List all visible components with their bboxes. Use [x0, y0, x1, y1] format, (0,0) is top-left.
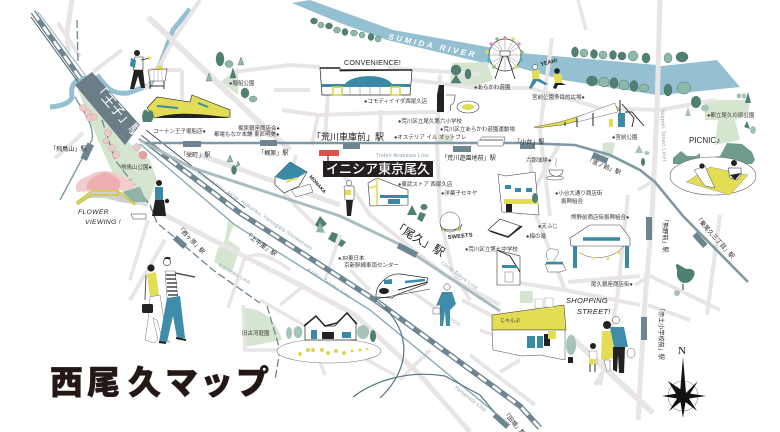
station labels: 「荒川遊園地前」駅	[441, 154, 496, 162]
station labels: 「東尾久三丁目」駅	[694, 214, 736, 260]
place labels: ●都立尾久の原公園	[707, 111, 755, 119]
station labels: 「熊野前」駅	[661, 216, 669, 253]
place labels: 梶原銀座商店会●	[238, 124, 280, 132]
stations: markers	[80, 140, 708, 429]
place labels: 尾久銀座商店街●	[591, 280, 633, 288]
place labels: ●梅の湯	[526, 232, 546, 240]
railway: Ueno Tokyo Line	[140, 140, 500, 311]
place labels: ●洋菓子セキヤ	[441, 189, 478, 197]
station labels: 「上中里」駅	[244, 230, 278, 258]
place labels: 振興組合	[561, 197, 584, 205]
illustration: tram	[477, 137, 505, 146]
text: picnic: PICNIC♪	[689, 136, 720, 145]
illustration: wine and dinner	[437, 85, 479, 113]
illustration: runners	[529, 58, 566, 89]
parks: green areas	[78, 62, 750, 347]
river label: SUMIDA RIVER	[388, 32, 478, 60]
illustration: sweets: SWEETS	[448, 232, 473, 241]
illustration: potted plant	[566, 335, 576, 363]
canal	[50, 9, 190, 107]
illustration: picnic scene	[670, 136, 756, 195]
station labels: 「西ヶ原」駅	[176, 225, 206, 256]
compass	[662, 345, 706, 418]
river: Sumida	[292, 0, 740, 95]
text: convenience: CONVENIENCE!	[344, 58, 401, 67]
railway: JR main lines	[31, 12, 540, 428]
place labels: ●コモディイイダ西尾久店	[364, 97, 428, 105]
marker: Initia location	[319, 150, 433, 177]
place labels: コーナン王子堀船店●	[153, 127, 206, 135]
place labels: ●小台大通り商店街	[555, 189, 603, 197]
station labels: 「赤土小学校前」駅	[657, 305, 665, 360]
illustration: woman with bag	[344, 180, 354, 216]
place labels: 旧古河庭園	[242, 329, 270, 337]
illustration: fried food	[488, 219, 522, 237]
place labels: ●東武ストア 西尾久店	[398, 180, 453, 188]
illustration: school	[497, 250, 520, 285]
place labels: 都電もなか本舗 東匠明美●	[214, 130, 279, 138]
railway: curving links	[353, 300, 495, 413]
place labels: 宮前公園多目的広場●	[532, 93, 585, 101]
illustration: coffee cup	[546, 158, 564, 180]
text: shopping street: STREET!	[577, 307, 611, 316]
illustration: shinkansen	[376, 274, 430, 299]
illustration: hanami park	[76, 171, 147, 205]
place labels: 熊野前商店街振興組合●	[571, 213, 629, 221]
trees: along the river	[310, 18, 691, 96]
illustration: shop: じゃんぷ	[500, 318, 520, 324]
label: Initia: イニシア東京尾久	[326, 162, 430, 176]
illustration: cherry blossoms	[80, 104, 147, 159]
line labels: Toden Arakawa Line	[376, 153, 429, 159]
line labels: Joetsu, Joetsu, Akita, Hokuriku, Yamagata Shinkansen	[191, 167, 313, 252]
illustration: couple walking	[142, 257, 195, 343]
title: 西尾久マップ	[50, 364, 269, 401]
station labels: 「宮ノ前」駅	[585, 155, 622, 177]
line labels: Ueno Tokyo Line	[440, 261, 479, 291]
illustration: Tobu store	[368, 178, 408, 206]
illustration: runners: YEAH!	[540, 58, 558, 68]
place labels: ●荒川区立尾久第六小学校	[398, 117, 462, 125]
place labels: ●オステリア イル オットブレ	[394, 133, 466, 141]
illustration: shop	[492, 298, 566, 360]
text: shopping street	[566, 296, 611, 316]
illustration: convenience store	[320, 58, 412, 95]
trees: near Sweets	[407, 204, 428, 222]
place labels: 六那珈琲●	[526, 156, 551, 164]
place labels: 京新幹線車両センター	[344, 261, 399, 269]
line labels: Nippori Toneri Liner	[659, 110, 667, 162]
illustration: building by Miyanomae	[498, 172, 539, 215]
station labels	[50, 131, 736, 432]
trees: around Ogu park	[635, 92, 756, 166]
station labels: 「栄町」駅	[180, 151, 210, 159]
illustration: Konan store	[142, 95, 230, 122]
illustration: woman with dog	[131, 180, 169, 219]
line labels: Nanboku Line	[217, 263, 251, 286]
illustration: sweets	[440, 212, 473, 241]
place labels: ●あらかわ遊園	[474, 83, 511, 91]
text: flower viewing	[78, 209, 121, 226]
station labels: 「尾久」駅	[390, 219, 447, 260]
station labels: 「小台」駅	[514, 138, 544, 146]
illustration: Monaka shop	[275, 162, 327, 197]
station labels: 「飛鳥山」駅	[50, 145, 87, 153]
place labels	[121, 79, 755, 337]
text: flower viewing: FLOWER	[78, 209, 109, 216]
illustration: family	[589, 316, 635, 373]
place labels: ●天ふじ	[538, 223, 558, 230]
station: Oji	[75, 72, 146, 145]
station: Oji: 「王子」駅	[90, 80, 146, 141]
text: flower viewing: VIEWING !	[85, 219, 121, 226]
text: monaka: MONAKA	[308, 174, 327, 195]
text: north: N	[678, 345, 686, 357]
line labels: Keihin Tohoku Line	[306, 268, 351, 300]
railway: Nanboku Line	[77, 20, 280, 380]
railway: Toden Arakawa Line	[145, 143, 748, 282]
illustration: playground slide	[534, 100, 644, 128]
place labels: ●宮前公園	[612, 133, 638, 141]
station labels: 「荒川車庫前」駅	[312, 131, 384, 142]
place labels: ●荒川区立第七中学校	[465, 245, 518, 253]
illustration: shopper with cart	[130, 50, 167, 89]
station labels: 「梶原」駅	[258, 149, 288, 157]
illustration: train depot trees	[315, 216, 346, 247]
place labels: ●JR東日本	[338, 254, 365, 262]
place labels: ●荒川区立あらかわ遊園運動場	[440, 125, 515, 133]
text: shopping street: SHOPPING	[566, 296, 608, 305]
illustration: Ferris wheel	[485, 36, 524, 79]
illustration: trees near Kumano	[674, 264, 695, 296]
line labels	[191, 110, 667, 414]
railway: Asukayama tram curve	[60, 97, 92, 200]
place labels: 飛鳥山公園●	[121, 163, 152, 171]
place labels: ●堀船公園	[229, 79, 255, 87]
line labels: Yamanote Line	[453, 385, 487, 414]
illustration: shopping arcade gate	[570, 225, 630, 268]
illustration: bathhouse	[545, 249, 566, 272]
illustration: businessman	[433, 284, 456, 326]
illustration: Furukawa garden house	[277, 313, 381, 363]
trees: near Horifune park	[206, 52, 257, 174]
